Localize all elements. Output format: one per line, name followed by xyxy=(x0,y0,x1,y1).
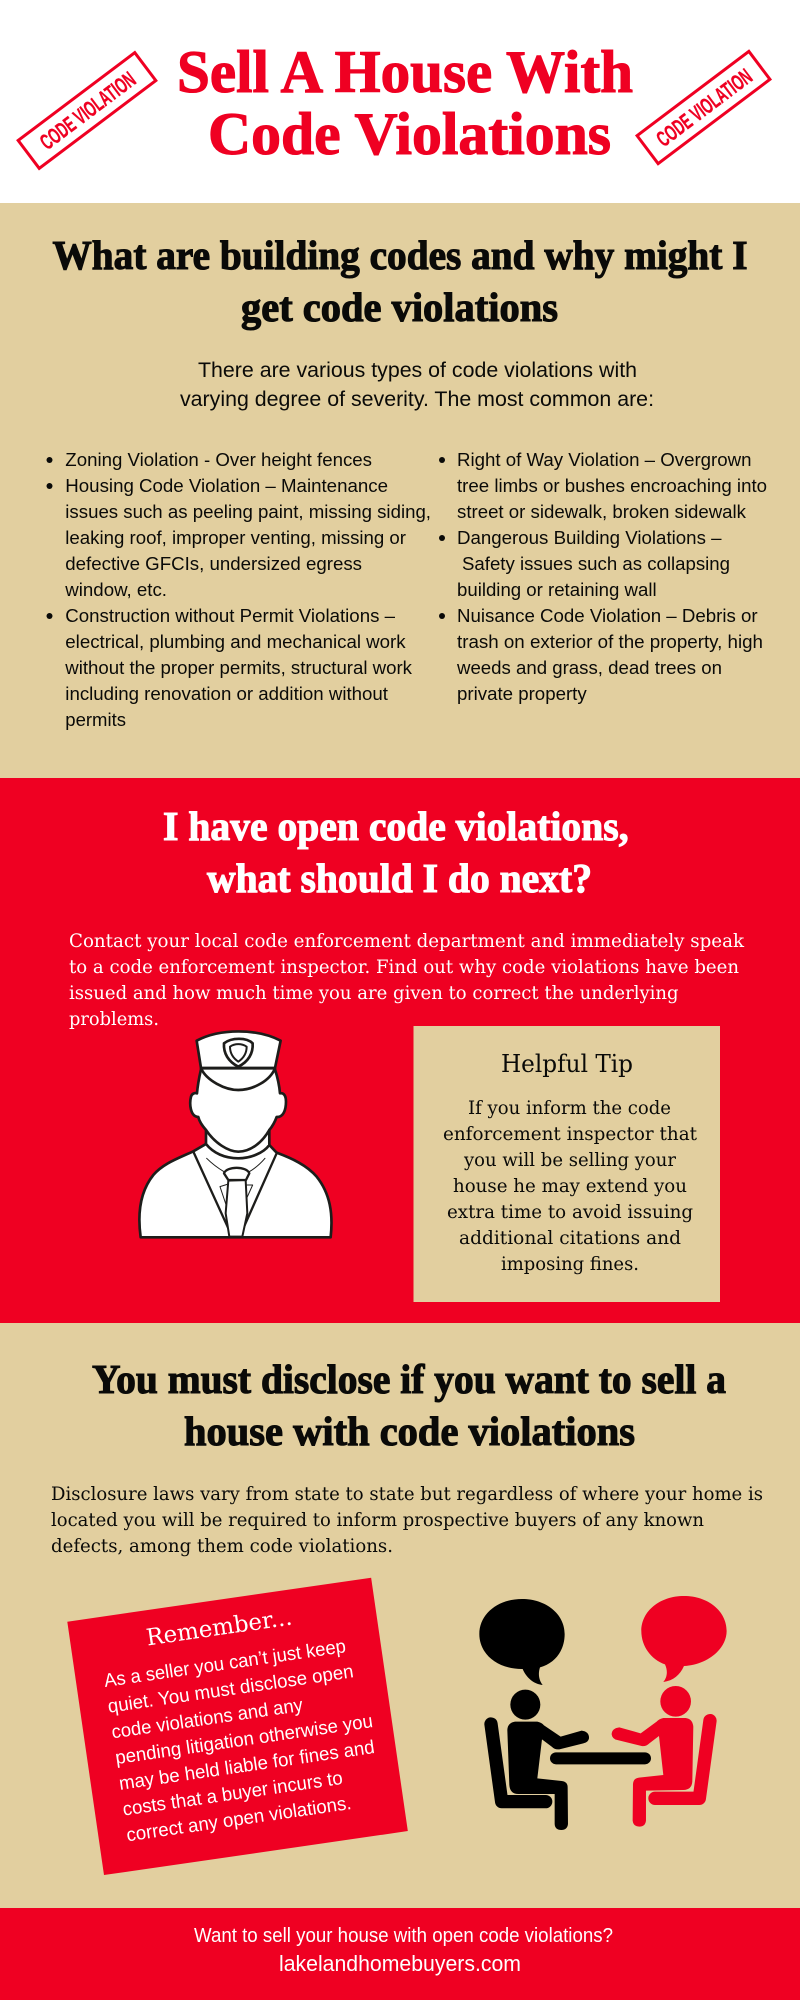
icon part: badge shield xyxy=(230,1044,247,1062)
icon: right code violation stamp xyxy=(637,51,770,164)
icon part: cap xyxy=(197,1031,281,1068)
icon part: badge xyxy=(224,1039,253,1067)
icon part: chin line xyxy=(206,1130,269,1152)
heading: I have open code violations, xyxy=(163,803,629,849)
list: left column: permits xyxy=(65,709,126,730)
remember text: code violations and any xyxy=(110,1695,305,1743)
icon part: shoulders xyxy=(139,1144,331,1237)
body text: issued and how much time you are given to correct the underlying xyxy=(69,982,679,1004)
list: left column xyxy=(46,449,431,730)
intro text: varying degree of severity. The most common are: xyxy=(180,388,654,411)
panel: what are building codes xyxy=(0,203,800,778)
heading xyxy=(92,1356,726,1454)
list: right column: building or retaining wall xyxy=(457,579,657,600)
heading xyxy=(163,803,629,901)
body text: Contact your local code enforcement department and immediately speak xyxy=(69,930,744,952)
list: right column: tree limbs or bushes encroaching into xyxy=(457,475,767,496)
intro text xyxy=(180,359,654,411)
list: left column: leaking roof, improper venting, missing or xyxy=(65,527,406,548)
body text: defects, among them code violations. xyxy=(51,1535,393,1557)
callout: remember: Remember... xyxy=(145,1605,294,1651)
list: right column: trash on exterior of the property, high xyxy=(457,631,763,652)
tip text: you will be selling your xyxy=(463,1149,677,1171)
icon part: tie knot xyxy=(224,1168,249,1180)
footer website: lakelandhomebuyers.com xyxy=(279,1951,521,1976)
tip text: house he may extend you xyxy=(453,1175,687,1197)
remember text: may be held liable for fines and xyxy=(118,1737,376,1795)
panel: open code violations xyxy=(0,778,800,1323)
heading: You must disclose if you want to sell a xyxy=(92,1356,726,1402)
icon part: black person xyxy=(491,1690,589,1830)
remember text xyxy=(103,1634,385,1846)
heading xyxy=(52,232,748,330)
icon part: red speech bubble xyxy=(641,1596,727,1682)
list: right column: street or sidewalk, broken sidewalk xyxy=(457,501,747,522)
footer question: Want to sell your house with open code violations? xyxy=(194,1925,613,1947)
tip text: If you inform the code xyxy=(468,1097,671,1119)
panel: header xyxy=(0,0,800,203)
remember text: quiet. You must disclose open xyxy=(106,1661,355,1718)
tip text: enforcement inspector that xyxy=(443,1123,697,1145)
list: right column: private property xyxy=(457,683,587,704)
list: left column: issues such as peeling paint, missing siding, xyxy=(65,501,431,522)
icon: code enforcement inspector xyxy=(139,1031,331,1237)
intro text: There are various types of code violations with xyxy=(198,359,637,382)
title xyxy=(177,39,633,167)
remember text: pending litigation otherwise you xyxy=(114,1711,374,1769)
callout: remember xyxy=(67,1578,408,1875)
icon part: lapels xyxy=(193,1152,277,1228)
panel: disclosure xyxy=(0,1323,800,1908)
list: left column: electrical, plumbing and mechanical work xyxy=(65,631,406,652)
icon: left code violation stamp xyxy=(18,53,156,168)
body text: to a code enforcement inspector. Find out why code violations have been xyxy=(69,956,739,978)
icon part: neck and head xyxy=(190,1069,286,1158)
list: left column: Zoning Violation - Over height fences xyxy=(65,449,372,470)
icon part: tie xyxy=(226,1180,247,1237)
tip text: additional citations and xyxy=(459,1227,681,1249)
heading: get code violations xyxy=(241,284,558,330)
icon part: table xyxy=(556,1740,645,1776)
icon part: red person xyxy=(612,1686,710,1827)
remember text: costs that a buyer incurs to xyxy=(121,1768,344,1821)
heading: what should I do next? xyxy=(207,855,592,901)
list: right column xyxy=(439,449,767,704)
heading: What are building codes and why might I xyxy=(52,232,748,278)
icon: left code violation stamp: CODE VIOLATION xyxy=(35,67,140,155)
icon part: visor xyxy=(201,1068,275,1090)
panel: footer xyxy=(0,1908,800,2000)
list: right column: Safety issues such as collapsing xyxy=(462,553,730,574)
list: left column: including renovation or addition without xyxy=(65,683,389,704)
body text: located you will be required to inform prospective buyers of any known xyxy=(51,1509,704,1531)
list: left column: Housing Code Violation – Maintenance xyxy=(65,475,388,496)
icon: two people talking at a table xyxy=(479,1596,727,1830)
tip text: imposing fines. xyxy=(501,1253,639,1275)
body text xyxy=(51,1483,763,1557)
heading: house with code violations xyxy=(184,1408,635,1454)
tip text xyxy=(443,1097,697,1275)
list: left column: defective GFCIs, undersized egress xyxy=(65,553,362,574)
callout: helpful tip xyxy=(414,1026,720,1302)
list: right column: weeds and grass, dead trees on xyxy=(456,657,722,678)
callout: helpful tip: Helpful Tip xyxy=(501,1050,633,1078)
title: Code Violations xyxy=(208,101,611,167)
icon part: black speech bubble xyxy=(479,1599,565,1685)
tip text: extra time to avoid issuing xyxy=(447,1201,693,1223)
list: left column: window, etc. xyxy=(64,579,167,600)
body text xyxy=(69,930,744,1030)
title: Sell A House With xyxy=(177,39,633,105)
remember text: As a seller you can’t just keep xyxy=(103,1636,347,1692)
icon part: shirt lines xyxy=(207,1158,265,1207)
body text: Disclosure laws vary from state to state but regardless of where your home is xyxy=(51,1483,763,1505)
list: right column: Dangerous Building Violations – xyxy=(457,527,722,548)
list: left column: without the proper permits, structural work xyxy=(64,657,413,678)
list: left column: Construction without Permit Violations – xyxy=(65,605,396,626)
list: right column: Nuisance Code Violation – Debris or xyxy=(457,605,758,626)
list: right column: Right of Way Violation – Overgrown xyxy=(457,449,752,470)
body text: problems. xyxy=(69,1008,159,1030)
remember text: correct any open violations. xyxy=(125,1793,353,1846)
